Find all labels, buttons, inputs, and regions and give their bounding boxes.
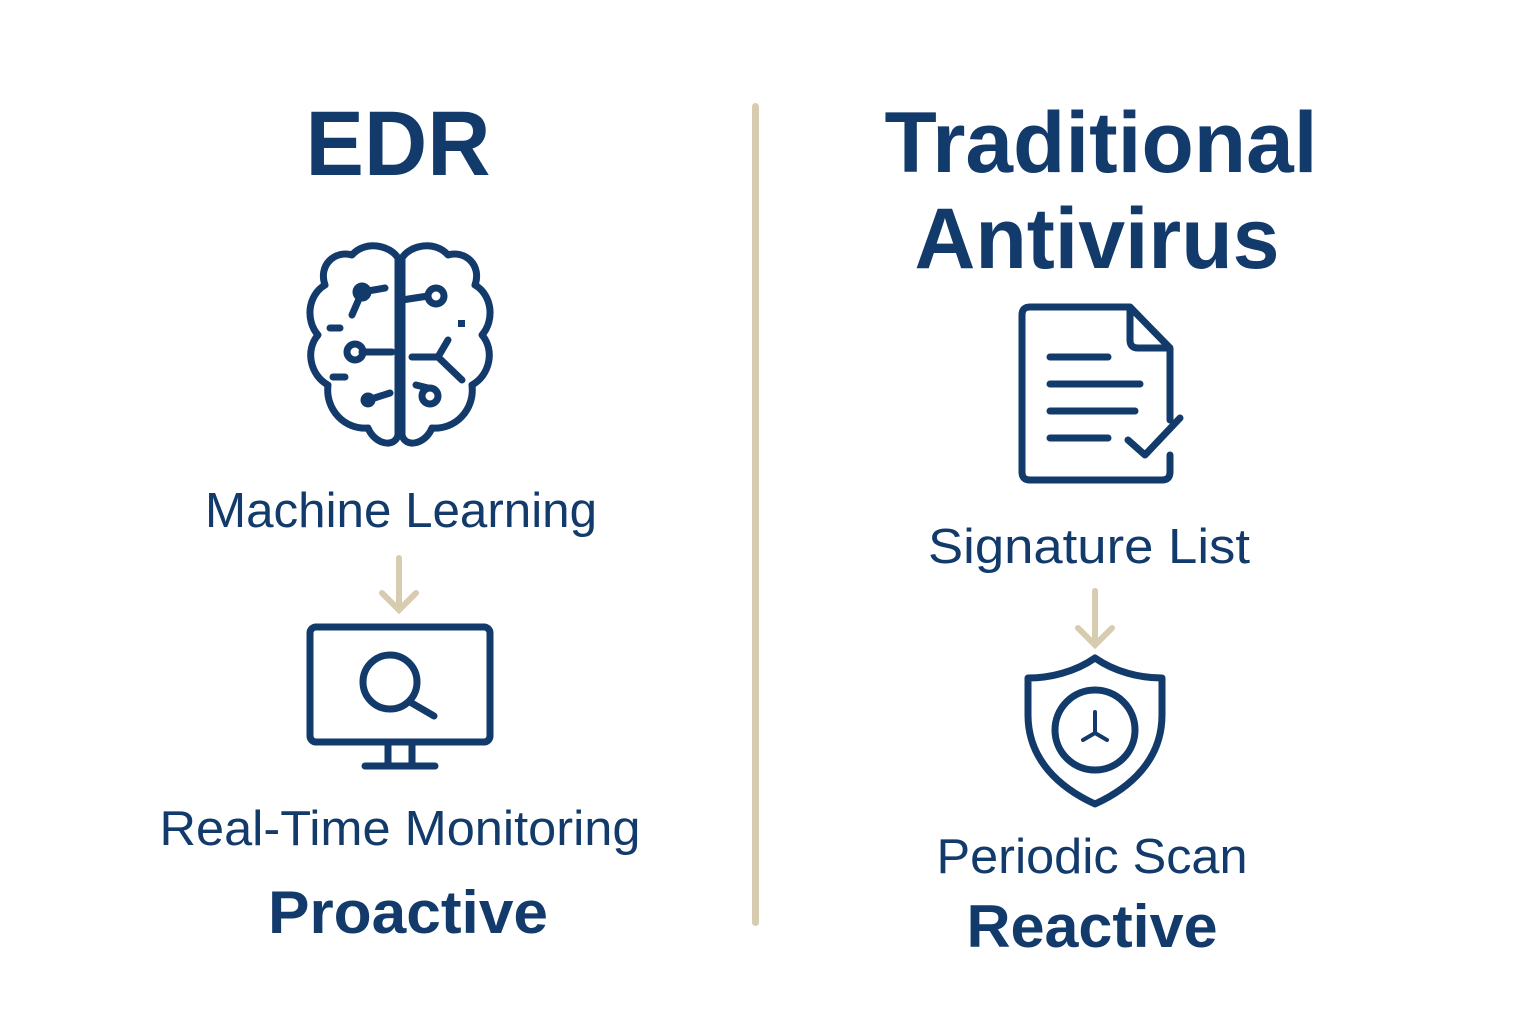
- icon: shield with clock: [1028, 658, 1162, 804]
- label: Proactive: Proactive: [268, 879, 548, 946]
- panel: Traditional Antivirus: [884, 95, 1318, 960]
- icon: document with check: [1022, 307, 1180, 480]
- arrow: down: [382, 558, 416, 610]
- label: Reactive: Reactive: [966, 893, 1218, 960]
- label: Real-Time Monitoring: Real-Time Monitoring: [160, 802, 640, 856]
- label: Machine Learning: Machine Learning: [205, 484, 597, 538]
- panel: Traditional Antivirus: Antivirus: [914, 191, 1280, 287]
- icon: brain: [310, 246, 490, 443]
- icon: monitor with magnifier: [310, 627, 490, 766]
- label: Signature List: Signature List: [928, 520, 1250, 574]
- title: EDR: EDR: [306, 93, 490, 195]
- title: Traditional Antivirus: Traditional: [884, 95, 1318, 191]
- arrow: down: [1078, 591, 1112, 645]
- label: Periodic Scan: Periodic Scan: [936, 830, 1248, 884]
- panel: EDR: [160, 93, 640, 946]
- divider: [752, 103, 759, 926]
